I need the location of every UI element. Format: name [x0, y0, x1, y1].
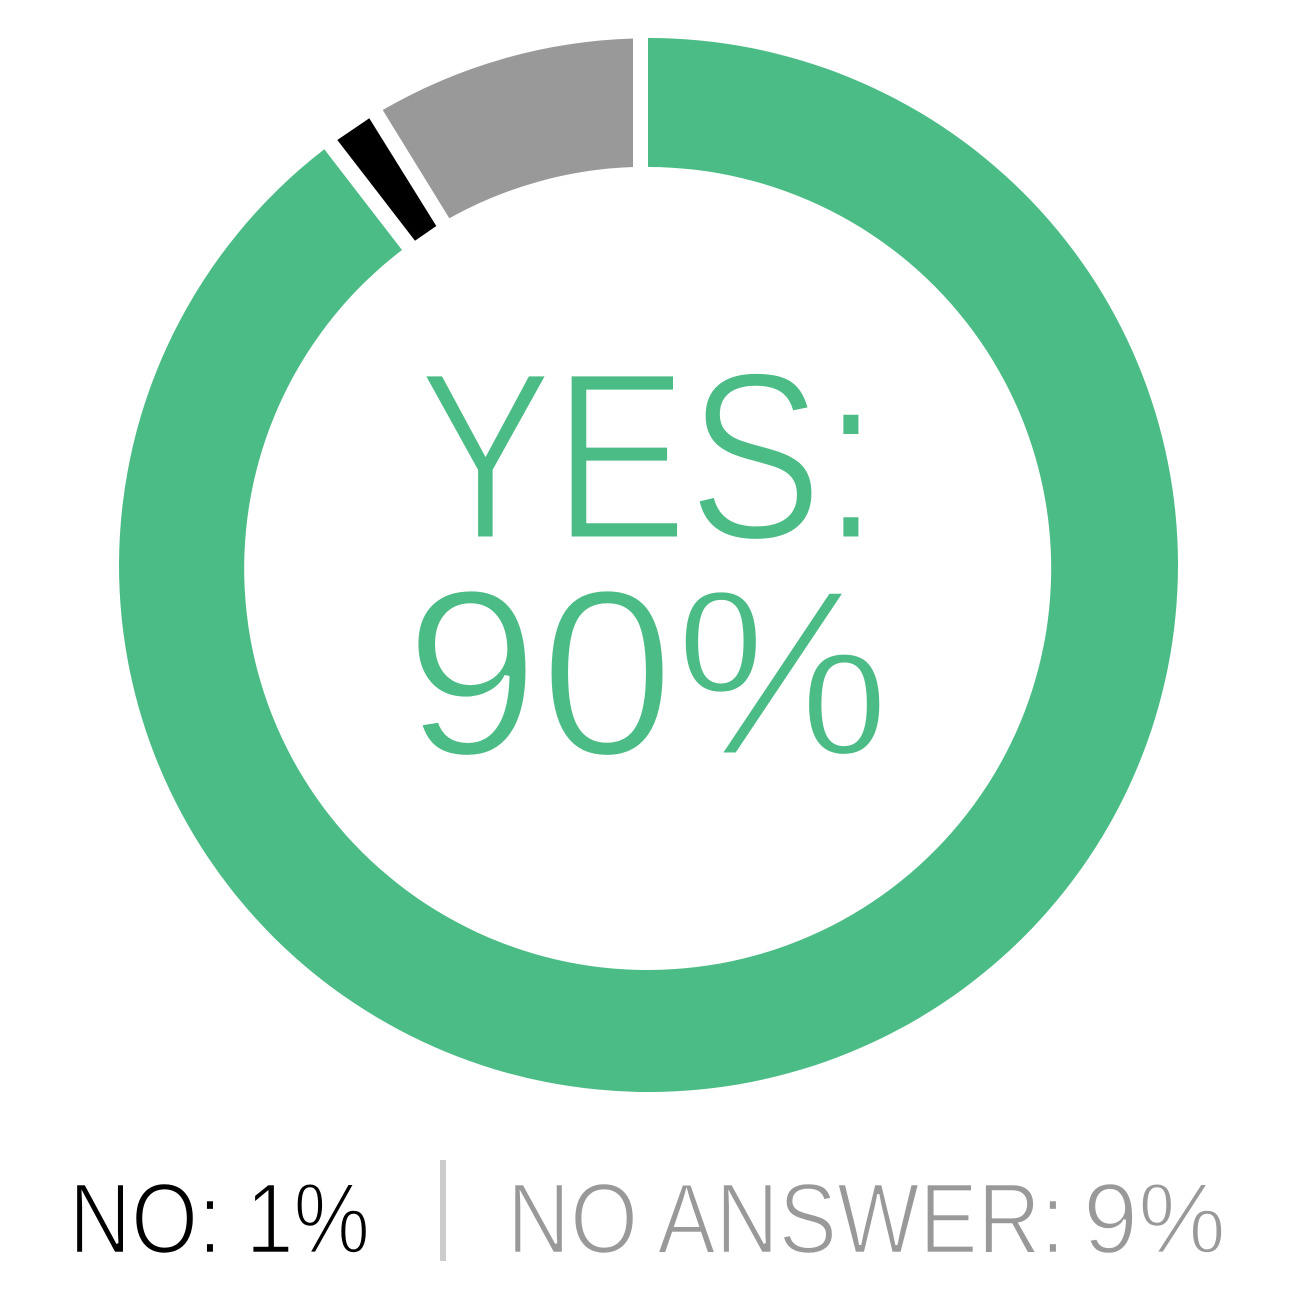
value: 90%: 90%	[404, 541, 890, 806]
segment: no answer 9%	[383, 38, 633, 218]
label: YES: YES:	[418, 322, 879, 590]
legend: no answer 9%: 9%	[1083, 1163, 1226, 1275]
segment: yes 90%	[119, 38, 1178, 1092]
legend divider	[440, 1160, 446, 1261]
segment: no 1%	[337, 118, 436, 241]
legend: no 1%: NO: 1%	[69, 1163, 370, 1275]
center label: yes 90%	[404, 322, 890, 806]
legend: no answer 9%: NO ANSWER:	[507, 1163, 1065, 1275]
donut chart	[119, 38, 1178, 1092]
